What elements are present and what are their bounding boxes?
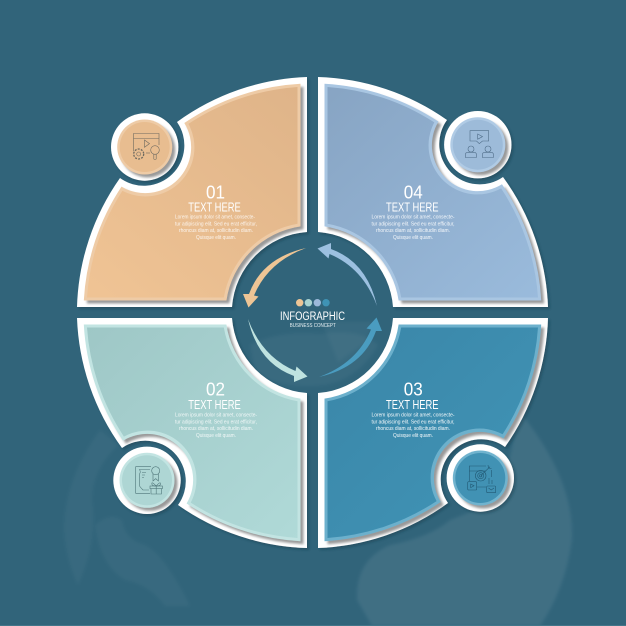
- icon badge 02: [113, 447, 181, 514]
- body 04: tur adipiscing elit. Sed eu erat efficitur,: [372, 222, 454, 228]
- panel 04 text: [372, 182, 455, 241]
- panel 01: [77, 77, 307, 307]
- panel 04 white frame: [318, 77, 548, 307]
- bottom edge line: [0, 625, 626, 626]
- heading 03: TEXT HERE: [386, 398, 439, 412]
- panel 03 text: [372, 380, 455, 439]
- body 01: Lorem ipsum dolor sit amet, consecte-: [175, 215, 255, 221]
- number 03: 03: [404, 380, 423, 400]
- icon: target with media boxes: [468, 465, 496, 493]
- panel 03 light band: [324, 324, 541, 541]
- heading 04: TEXT HERE: [386, 200, 439, 214]
- body 03: rhoncus diam at, sollicitudin diam.: [376, 426, 450, 432]
- body 04: Quisque elit quam.: [393, 235, 433, 241]
- icon badge 03: [447, 444, 514, 512]
- body 03: Quisque elit quam.: [393, 433, 433, 439]
- icon: certificate and gift: [136, 467, 162, 494]
- arrow: peach: [243, 248, 306, 308]
- panel 04 fill: [328, 87, 538, 298]
- panel 01 white frame: [77, 77, 307, 307]
- icon badge 01: [111, 113, 178, 181]
- arrow: mint: [248, 319, 308, 382]
- body 03: tur adipiscing elit. Sed eu erat efficitur,: [372, 419, 454, 425]
- center subtitle: BUSINESS CONCEPT: [290, 323, 336, 329]
- panel 02 text: [175, 380, 257, 439]
- body 04: rhoncus diam at, sollicitudin diam.: [376, 228, 450, 234]
- heading 01: TEXT HERE: [188, 200, 241, 214]
- number 01: 01: [206, 182, 225, 202]
- arrow: teal: [319, 318, 382, 377]
- center cycle: [243, 243, 382, 382]
- panel 04: [318, 77, 548, 307]
- body 03: Lorem ipsum dolor sit amet, consecte-: [372, 412, 455, 418]
- heading 02: TEXT HERE: [188, 398, 241, 412]
- body 02: tur adipiscing elit. Sed eu erat efficitur,: [175, 419, 257, 425]
- body 01: [175, 215, 257, 241]
- body 02: Lorem ipsum dolor sit amet, consecte-: [175, 412, 257, 418]
- world globe watermark: [64, 322, 572, 626]
- icon: video chat with two people: [465, 131, 494, 158]
- body 01: rhoncus diam at, sollicitudin diam.: [179, 228, 253, 234]
- number 02: 02: [206, 380, 225, 400]
- number 04: 04: [404, 182, 423, 202]
- icon badge 04: [444, 111, 511, 178]
- four colour dots: [296, 299, 330, 306]
- panel 02: [77, 318, 307, 548]
- panel 01 text: [175, 182, 257, 241]
- body 04: Lorem ipsum dolor sit amet, consecte-: [372, 215, 455, 221]
- panel 02 white frame: [77, 318, 307, 548]
- panel 03: [318, 318, 548, 548]
- panel 01 light band: [84, 84, 300, 300]
- panel 04 light band: [324, 84, 541, 300]
- body 01: tur adipiscing elit. Sed eu erat efficitur,: [175, 222, 257, 228]
- body 03: [372, 412, 455, 439]
- panel 02 fill: [87, 328, 298, 538]
- icon: video, gear and magnifier: [134, 134, 159, 160]
- center title: INFOGRAPHIC: [280, 309, 345, 323]
- body 02: rhoncus diam at, sollicitudin diam.: [179, 426, 253, 432]
- body 02: Quisque elit quam.: [196, 433, 236, 439]
- panel 03 fill: [328, 328, 538, 538]
- panel 03 white frame: [318, 318, 548, 548]
- body 01: Quisque elit quam.: [196, 235, 236, 241]
- arrow: blue: [318, 243, 377, 306]
- panel 01 fill: [87, 87, 298, 298]
- body 04: [372, 215, 455, 241]
- body 02: [175, 412, 257, 439]
- panel 02 light band: [84, 324, 300, 541]
